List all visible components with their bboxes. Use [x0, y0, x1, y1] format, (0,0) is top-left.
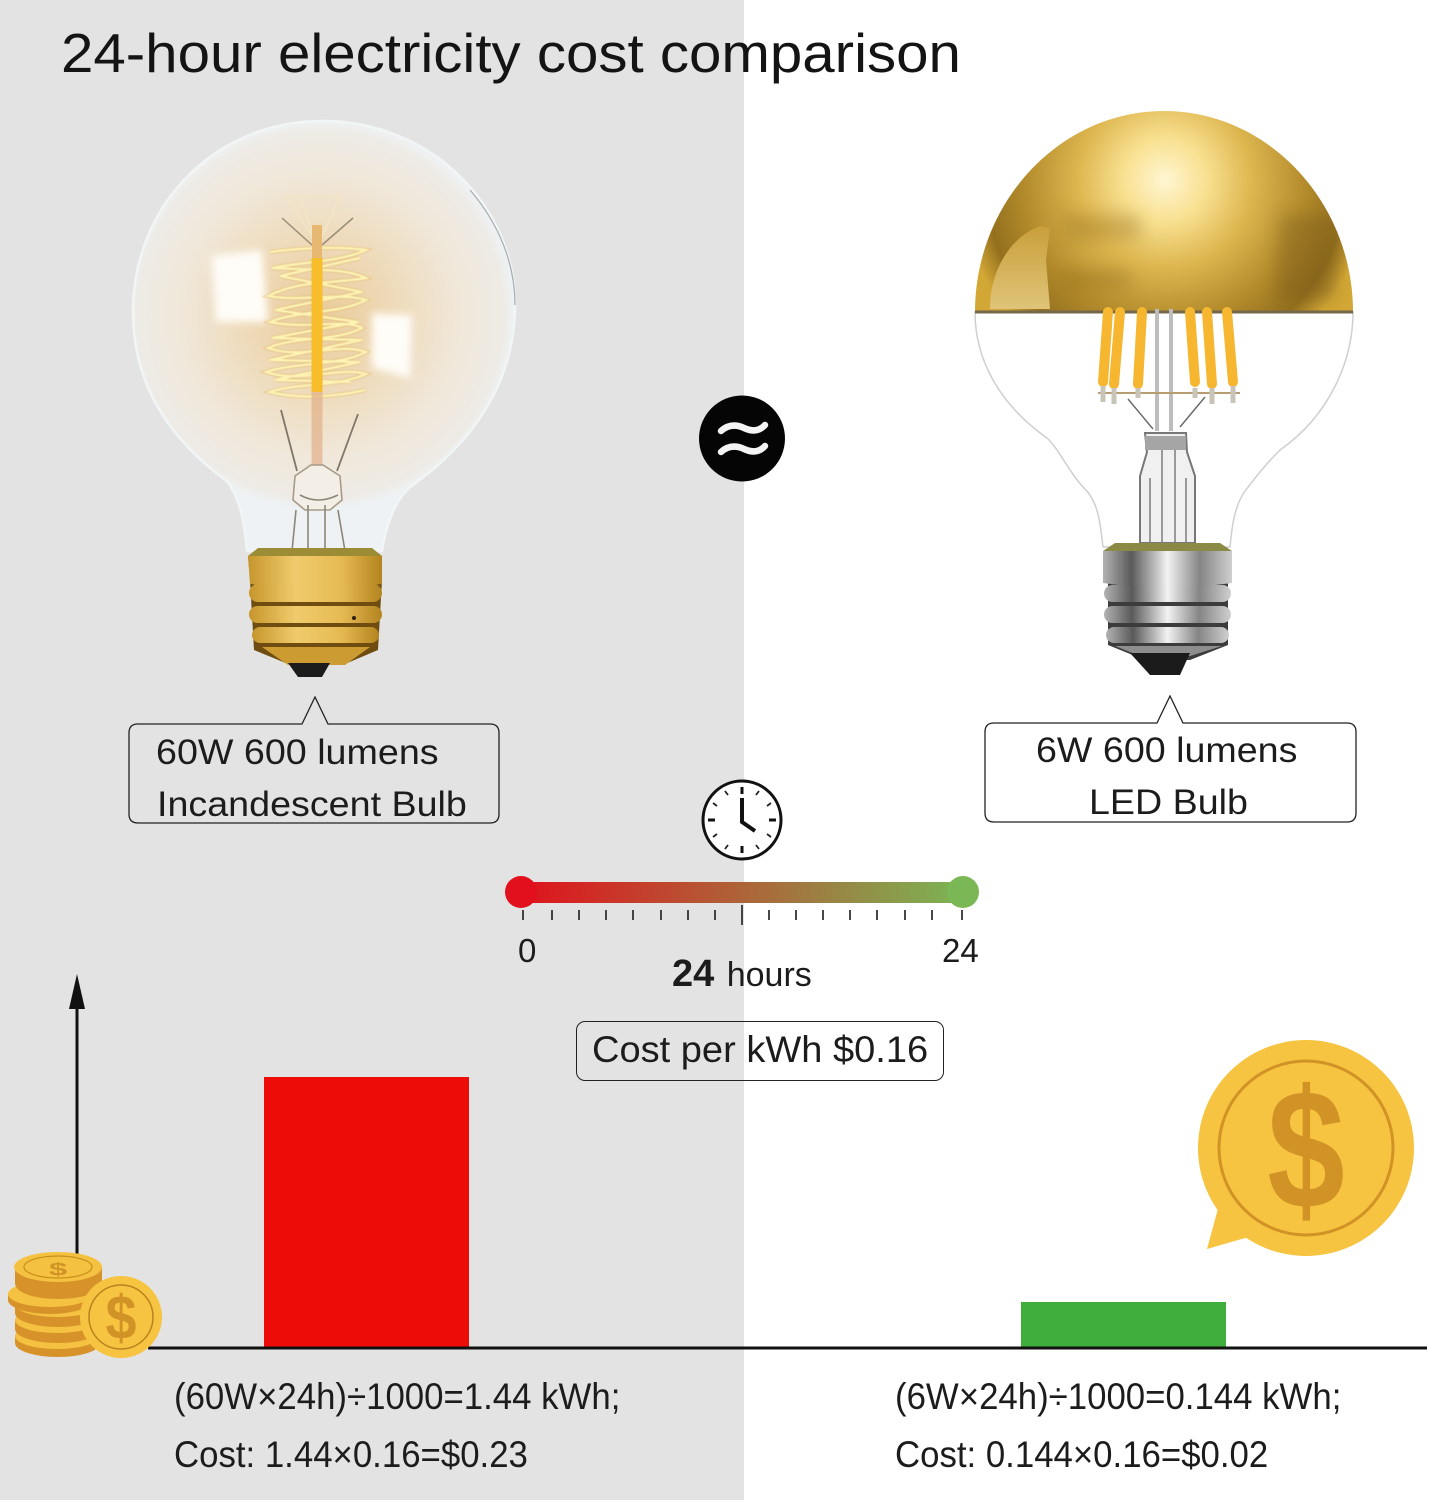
bar: LED [1021, 1302, 1226, 1348]
LED calculation: Cost: 0.144×0.16=$0.02 [895, 1434, 1268, 1475]
callout: LED: 6W 600 lumens [1036, 731, 1297, 770]
icon: clock [703, 781, 781, 859]
duration label: 24 hours [672, 953, 812, 995]
icon: incandescent bulb [133, 121, 515, 677]
y axis arrow [69, 974, 85, 1255]
callout: LED [984, 695, 1357, 823]
icon: coin stack: $ [105, 1284, 137, 1353]
LED calculation: (6W×24h)÷1000=0.144 kWh; [895, 1376, 1341, 1417]
icon: coin stack: $ [49, 1259, 68, 1279]
grey background panel [0, 0, 744, 1500]
bar: incandescent [264, 1077, 469, 1348]
LED calculation [895, 1376, 1341, 1475]
icon: dollar speech bubble [1198, 1040, 1414, 1256]
icon: half-gold LED bulb [975, 111, 1353, 675]
icon: coin stack [8, 1252, 162, 1358]
icon: dollar speech bubble: $ [1267, 1054, 1345, 1244]
timeline start label: 0 [518, 932, 536, 969]
callout: incandescent: Incandescent Bulb [157, 785, 467, 824]
incandescent calculation: Cost: 1.44×0.16=$0.23 [174, 1434, 528, 1475]
incandescent calculation: (60W×24h)÷1000=1.44 kWh; [174, 1376, 620, 1417]
callout: LED: LED Bulb [1089, 783, 1248, 822]
incandescent calculation [174, 1376, 620, 1475]
cost per kWh box [576, 1021, 944, 1081]
timeline bar [505, 876, 979, 925]
x axis [148, 1346, 1427, 1350]
title: 24-hour electricity cost comparison [61, 22, 961, 84]
callout: incandescent [128, 696, 500, 824]
timeline end label: 24 [942, 932, 979, 969]
callout: incandescent: 60W 600 lumens [156, 733, 439, 772]
cost per kWh box: Cost per kWh $0.16 [592, 1029, 928, 1070]
icon: approximately-equal badge [699, 396, 785, 482]
